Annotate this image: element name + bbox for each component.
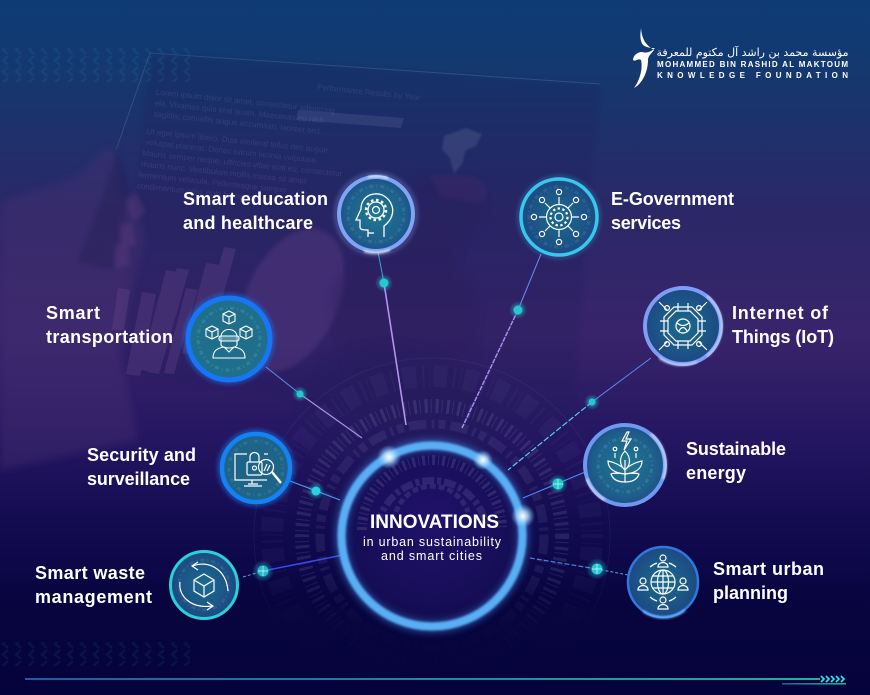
faint report text: Mauris semper neque, ultricies vitae erat eu, consectetur xyxy=(142,149,343,179)
faint report text: Performance Results by Year xyxy=(317,82,421,102)
arabic name: مؤسسة محمد بن راشد آل مكتوم للمعرفة xyxy=(656,45,849,59)
label: smart urban planning xyxy=(713,559,824,603)
label: smart transportation xyxy=(46,303,173,347)
central title: INNOVATIONS xyxy=(370,512,499,533)
icon circle: e-government services xyxy=(519,177,599,257)
connector: education xyxy=(375,252,406,425)
icon: head with gear xyxy=(356,194,393,237)
label: internet of things: Things (IoT) xyxy=(732,327,834,347)
faint report text: fermentum vehicula. Pellentesque semper xyxy=(138,170,288,195)
icon: globe with people xyxy=(638,555,688,609)
icon circle: sustainable energy xyxy=(585,425,666,505)
central subtitle xyxy=(363,535,502,563)
label: smart urban planning: Smart urban xyxy=(713,559,824,579)
icon: network gear xyxy=(531,189,587,245)
world map xyxy=(442,128,482,174)
icon circle: smart waste management xyxy=(170,552,238,618)
icon circle: smart education and healthcare xyxy=(336,174,416,254)
faint report text: elit. Vivamus quis erat quam. Maecenas eu nibh xyxy=(154,99,324,125)
top fade xyxy=(0,0,870,70)
inner tech arcs, upper half xyxy=(362,460,502,530)
connector: e-government xyxy=(462,254,541,428)
central subtitle: and smart cities xyxy=(381,549,482,563)
label: security and surveillance: surveillance xyxy=(87,469,190,489)
icon: cube with recycling arrows xyxy=(180,562,228,610)
label: sustainable energy xyxy=(686,439,786,483)
label: smart education and healthcare xyxy=(183,189,328,233)
label: smart waste management: management xyxy=(35,587,152,607)
icon: plant with lightning bolt xyxy=(608,432,642,482)
faint report text: mauris nunc. Vestibulum mollis massa sit amet xyxy=(141,159,307,186)
central subtitle: in urban sustainability xyxy=(363,535,502,549)
icon circle: smart transportation xyxy=(186,296,272,382)
chevron pattern: top left xyxy=(0,48,190,82)
sleeve xyxy=(300,344,500,460)
ring glow xyxy=(341,445,523,627)
icon: calligraphic logo mark xyxy=(633,28,655,88)
label: smart education and healthcare: Smart education xyxy=(183,189,328,209)
label: smart transportation: Smart xyxy=(46,303,100,323)
label: smart education and healthcare: and healthcare xyxy=(183,213,313,233)
dark tablet edge xyxy=(78,150,130,270)
right hand xyxy=(330,175,485,430)
label: sustainable energy: energy xyxy=(686,463,746,483)
icon circle: internet of things xyxy=(645,288,722,365)
english name line 1: MOHAMMED BIN RASHID AL MAKTOUM xyxy=(657,60,848,69)
connector: smart waste xyxy=(243,554,348,582)
icon circle: smart urban planning xyxy=(628,547,698,618)
logo: Mohammed Bin Rashid Al Maktoum Knowledge Foundation xyxy=(633,28,849,88)
tablet screen xyxy=(118,52,600,440)
central dial: decorative tech arcs xyxy=(254,358,610,695)
label: e-government services: E-Government xyxy=(611,189,734,209)
faint report text: volutpat placerat. Donec rutrum lacinia vulputate. xyxy=(145,138,319,165)
icon: circuit chip xyxy=(659,302,707,350)
label: smart waste management xyxy=(35,563,152,607)
background photo: hands holding a tablet with charts xyxy=(0,52,600,470)
lower shade over the dial xyxy=(0,570,870,695)
left hand xyxy=(0,148,146,470)
faint report text: Lorem ipsum dolor sit amet, consectetur adipiscing xyxy=(155,88,335,115)
icon: person with VR headset and cubes xyxy=(206,311,252,358)
pie chart xyxy=(218,212,366,388)
label: security and surveillance xyxy=(87,445,196,489)
bar chart xyxy=(112,247,236,376)
connector: internet of things xyxy=(508,358,651,470)
label: internet of things xyxy=(732,303,834,347)
label: e-government services: services xyxy=(611,213,681,233)
label: e-government services xyxy=(611,189,734,233)
label: sustainable energy: Sustainable xyxy=(686,439,786,459)
faint report text: Ut eget ipsum libero. Duis eleifend tellus nec augue xyxy=(146,127,329,155)
label: smart transportation: transportation xyxy=(46,327,173,347)
fingers xyxy=(112,192,146,269)
connector: security xyxy=(290,481,340,500)
connector: sustainable energy xyxy=(523,472,585,498)
central ring with title xyxy=(341,445,535,627)
label: smart waste management: Smart waste xyxy=(35,563,145,583)
faint report text: sagittis, convallis augue accumsan, laoreet orci. xyxy=(153,109,323,136)
icon: monitor with padlock and magnifier xyxy=(235,452,281,486)
chevron pattern: bottom left xyxy=(0,642,190,666)
label: smart urban planning: planning xyxy=(713,583,788,603)
ring flares xyxy=(377,445,401,469)
faint report text xyxy=(137,65,421,219)
label: security and surveillance: Security and xyxy=(87,445,196,465)
icon circle: security and surveillance xyxy=(220,432,292,504)
connector: urban planning xyxy=(530,558,628,580)
table header xyxy=(296,110,404,128)
label: internet of things: Internet of xyxy=(732,303,829,323)
english name line 2: KNOWLEDGE FOUNDATION xyxy=(657,71,848,80)
faint report text: condimentum odio, quis fermentum lectus xyxy=(137,181,285,206)
footer line with arrows xyxy=(25,676,846,685)
connector: transportation xyxy=(266,367,362,438)
